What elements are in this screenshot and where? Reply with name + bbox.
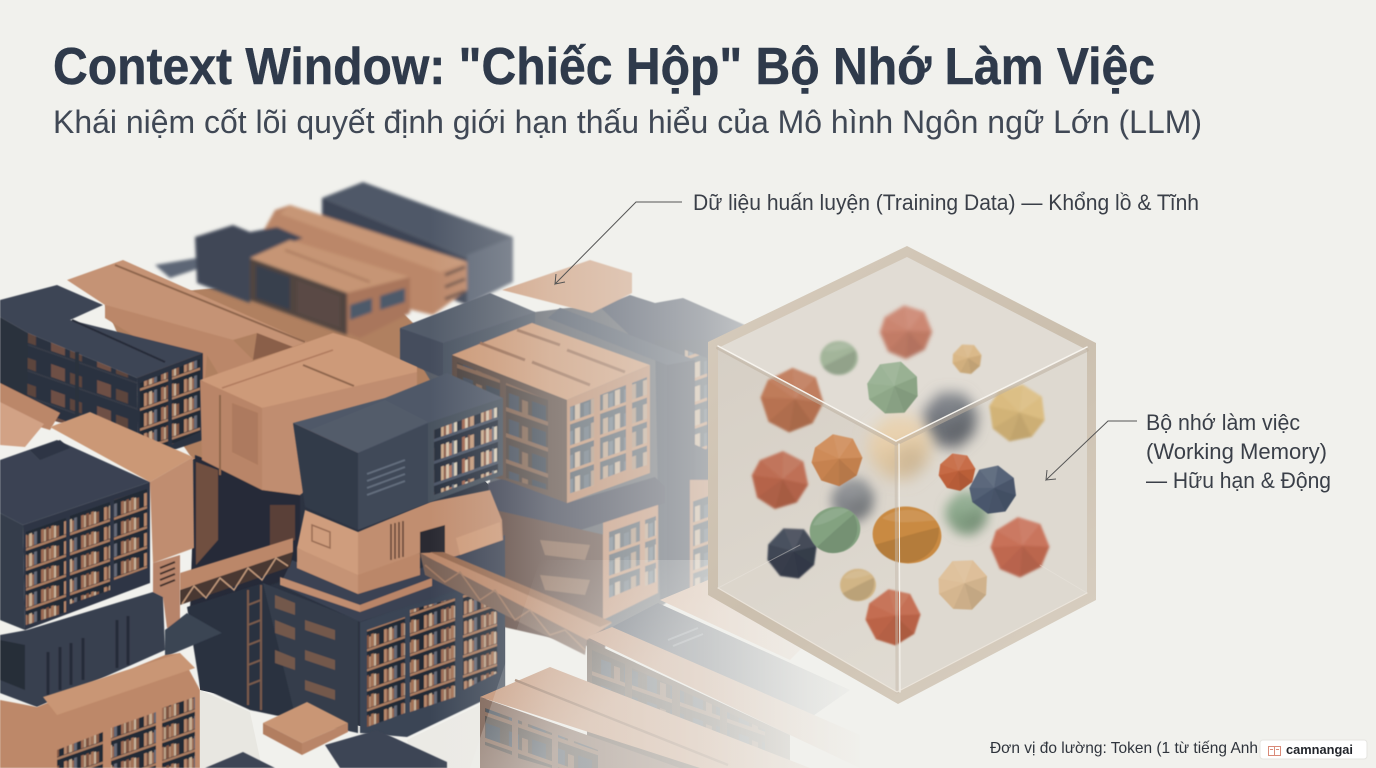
shelf tower: [452, 323, 650, 400]
watermark badge: [1260, 740, 1367, 759]
cube right face: [896, 350, 1087, 692]
pink floor near cube: [660, 580, 810, 660]
label: working memory: [1146, 410, 1331, 493]
underlay mid right: [400, 300, 745, 650]
arrow: working memory: [1046, 421, 1137, 480]
underlay tan: [105, 280, 450, 480]
label: working memory: — Hữu hạn & Động: [1146, 468, 1331, 493]
glass cube: working memory: [708, 246, 1096, 704]
bottom centre boxes: [205, 702, 447, 768]
label: training data: Dữ liệu huấn luyện (Training Data) — Khổng lồ & Tĩnh: [693, 190, 1199, 215]
central lower building with book shelves: [187, 570, 505, 737]
label: working memory: (Working Memory): [1146, 439, 1327, 464]
tan platform below the navy block: [280, 490, 505, 622]
floor patches: [200, 690, 262, 768]
lower right long shelf building: [587, 627, 860, 768]
floor patch centre: [407, 700, 490, 768]
tokens inside the cube: [743, 301, 1055, 649]
subtitle: Khái niệm cốt lõi quyết định giới hạn thấu hiểu của Mô hình Ngôn ngữ Lớn (LLM): [53, 104, 1202, 140]
cube top face: [718, 257, 1087, 444]
central tan block: [190, 333, 417, 612]
underlay dark: [190, 420, 505, 735]
far back buildings, out of focus: [155, 182, 513, 338]
arrow: training data: [555, 202, 682, 284]
fade overlay lower right: [470, 560, 900, 768]
title: Context Window: "Chiếc Hộp" Bộ Nhớ Làm Việc: [53, 38, 1155, 96]
left long roofs and shelf building: [0, 260, 307, 462]
bridge from front tower: [180, 538, 293, 605]
front left tower with book shelves: [0, 412, 222, 707]
cube left face: [718, 348, 897, 692]
navy slab lower right: [612, 603, 850, 725]
cube frame: [708, 246, 1096, 704]
navy block with vents and lit shelf: [293, 373, 503, 530]
mid right buildings behind the cube: [400, 260, 745, 650]
label: working memory: Bộ nhớ làm việc: [1146, 410, 1300, 435]
footnote: Đơn vị đo lường: Token (1 từ tiếng Anh: [990, 740, 1258, 757]
cube front edges: [718, 346, 1087, 692]
fade overlay: [430, 150, 1376, 768]
bottom left tan shelf building: [0, 653, 200, 768]
front lower right shelf building: [480, 667, 810, 768]
bridge to right buildings: [420, 552, 612, 655]
watermark badge: camnangai: [1286, 742, 1353, 757]
